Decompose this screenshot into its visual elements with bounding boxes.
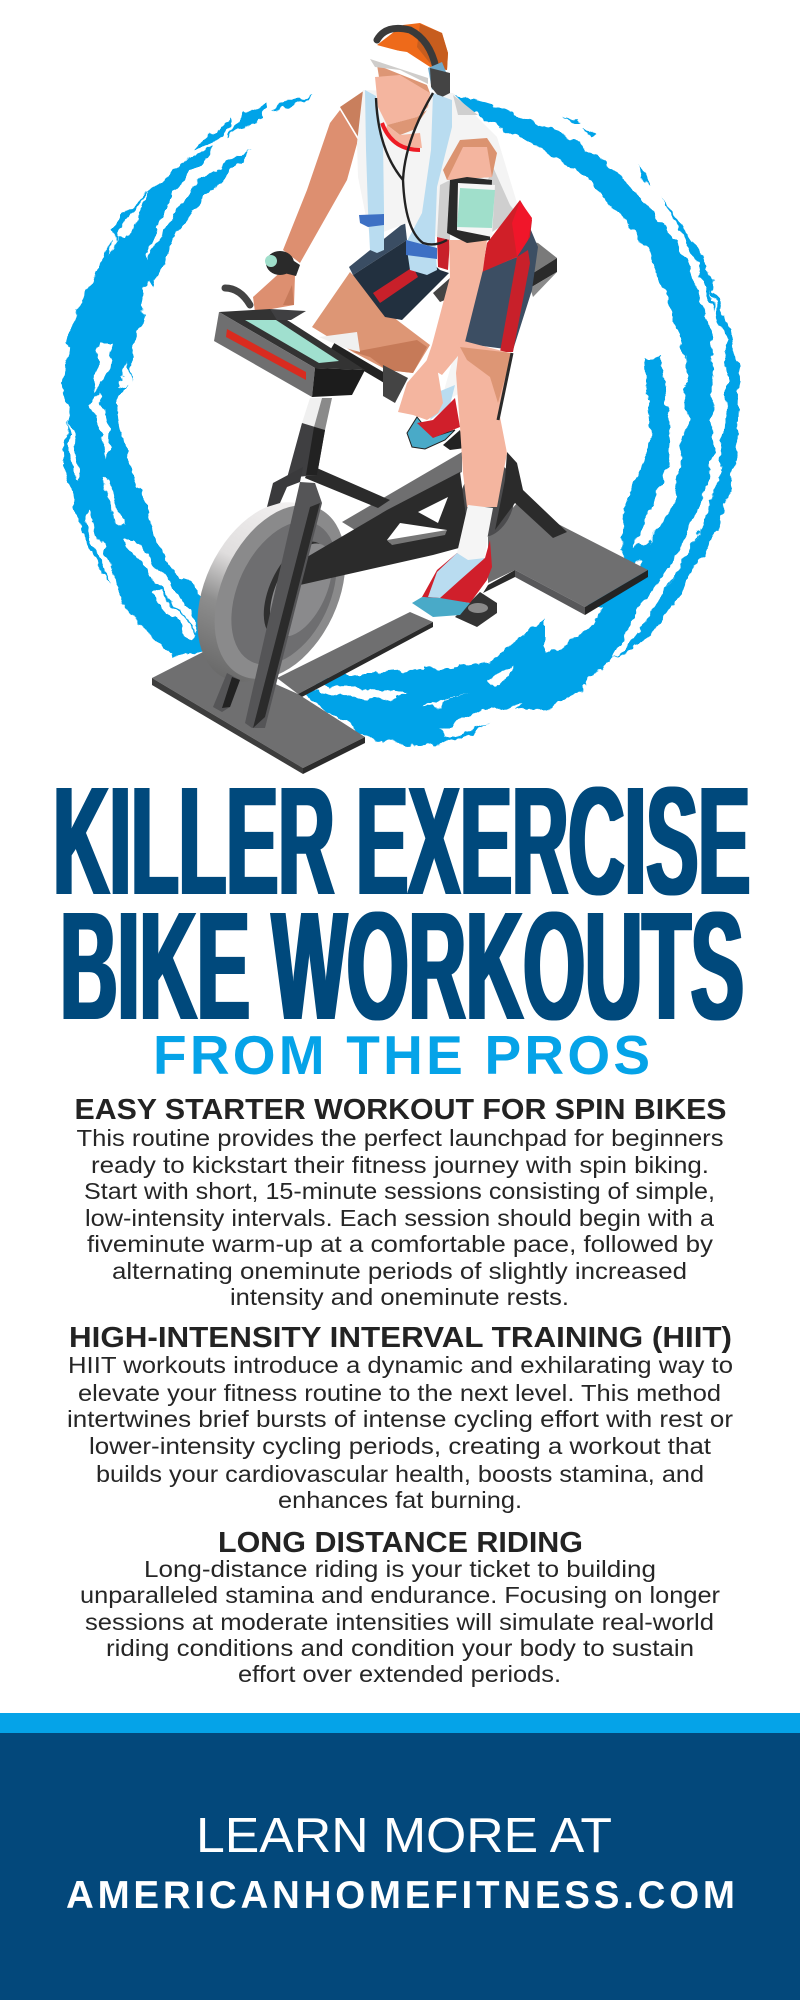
section: easy starter workout [74, 1094, 726, 1310]
illustration: flywheel [170, 481, 371, 703]
section: high-intensity interval training [67, 1322, 733, 1513]
section: long distance riding: sessions at moderate intensities will simulate real-world [85, 1609, 714, 1635]
illustration: near hand [398, 360, 443, 420]
section: long distance riding: Long-distance riding is your ticket to building [144, 1556, 656, 1582]
illustration: saddle [433, 240, 557, 302]
illustration: shirt [357, 90, 532, 272]
section: easy starter workout: intensity and oneminute rests. [230, 1284, 569, 1310]
section: long distance riding: riding conditions and condition your body to sustain [106, 1635, 694, 1661]
illustration: earphone cable [376, 93, 447, 244]
illustration: near sock, shoe and pedal [412, 505, 497, 627]
subtitle: FROM THE PROS [153, 1024, 650, 1086]
section: high-intensity interval training: enhances fat burning. [278, 1487, 522, 1513]
illustration: upper frame rail [342, 452, 462, 530]
section: high-intensity interval training: elevate your fitness routine to the next level. This method [78, 1380, 721, 1406]
footer accent band [0, 1713, 800, 1733]
footer panel [0, 1733, 800, 2000]
illustration: shorts [349, 222, 538, 352]
illustration: rider far leg and shoe [312, 272, 465, 450]
illustration: long base bar [277, 612, 433, 698]
section: easy starter workout: fiveminute warm-up at a comfortable pace, followed by [87, 1231, 714, 1257]
section: high-intensity interval training: lower-intensity cycling periods, creating a workout that [89, 1433, 712, 1459]
section: long distance riding [80, 1527, 720, 1687]
illustration: cap, visor and headphones [370, 23, 450, 98]
illustration: console and handlebars [214, 288, 408, 403]
illustration: main dark frame [300, 465, 470, 585]
section: easy starter workout: alternating oneminute periods of slightly increased [112, 1258, 687, 1284]
illustration: head and neck [375, 65, 430, 150]
illustration: rear pulley and brace [451, 452, 567, 544]
illustration: front fork [213, 482, 322, 728]
section: easy starter workout: This routine provides the perfect launchpad for beginners [76, 1125, 724, 1151]
illustration: blue brush-stroke ring [62, 93, 739, 745]
illustration: front floor plate [152, 652, 365, 774]
illustration: near leg [456, 340, 512, 507]
illustration: rider far arm and hand [253, 90, 365, 312]
illustration: towel [359, 90, 452, 275]
footer website: AMERICANHOMEFITNESS.COM [66, 1874, 735, 1917]
section: easy starter workout: ready to kickstart their fitness journey with spin biking. [91, 1152, 709, 1178]
title [53, 755, 750, 1052]
illustration: rear floor plate [483, 503, 648, 615]
section: high-intensity interval training: HIGH-INTENSITY INTERVAL TRAINING (HIIT) [69, 1322, 732, 1354]
section: easy starter workout: EASY STARTER WORKOUT FOR SPIN BIKES [74, 1094, 726, 1126]
section: easy starter workout: low-intensity intervals. Each session should begin with a [85, 1205, 714, 1231]
section: high-intensity interval training: intertwines brief bursts of intense cycling effort with rest or [67, 1406, 733, 1432]
illustration: near arm with phone armband [425, 138, 497, 375]
section: easy starter workout: Start with short, 15-minute sessions consisting of simple, [84, 1178, 715, 1204]
section: high-intensity interval training: HIIT workouts introduce a dynamic and exhilarating way to [68, 1352, 733, 1378]
section: high-intensity interval training: builds your cardiovascular health, boosts stamina, and [96, 1461, 704, 1487]
section: long distance riding: unparalleled stamina and endurance. Focusing on longer [80, 1582, 720, 1608]
section: long distance riding: LONG DISTANCE RIDING [218, 1527, 583, 1559]
footer call to action: LEARN MORE AT [196, 1809, 612, 1863]
illustration: seat post column [267, 398, 332, 507]
section: long distance riding: effort over extended periods. [238, 1661, 561, 1687]
